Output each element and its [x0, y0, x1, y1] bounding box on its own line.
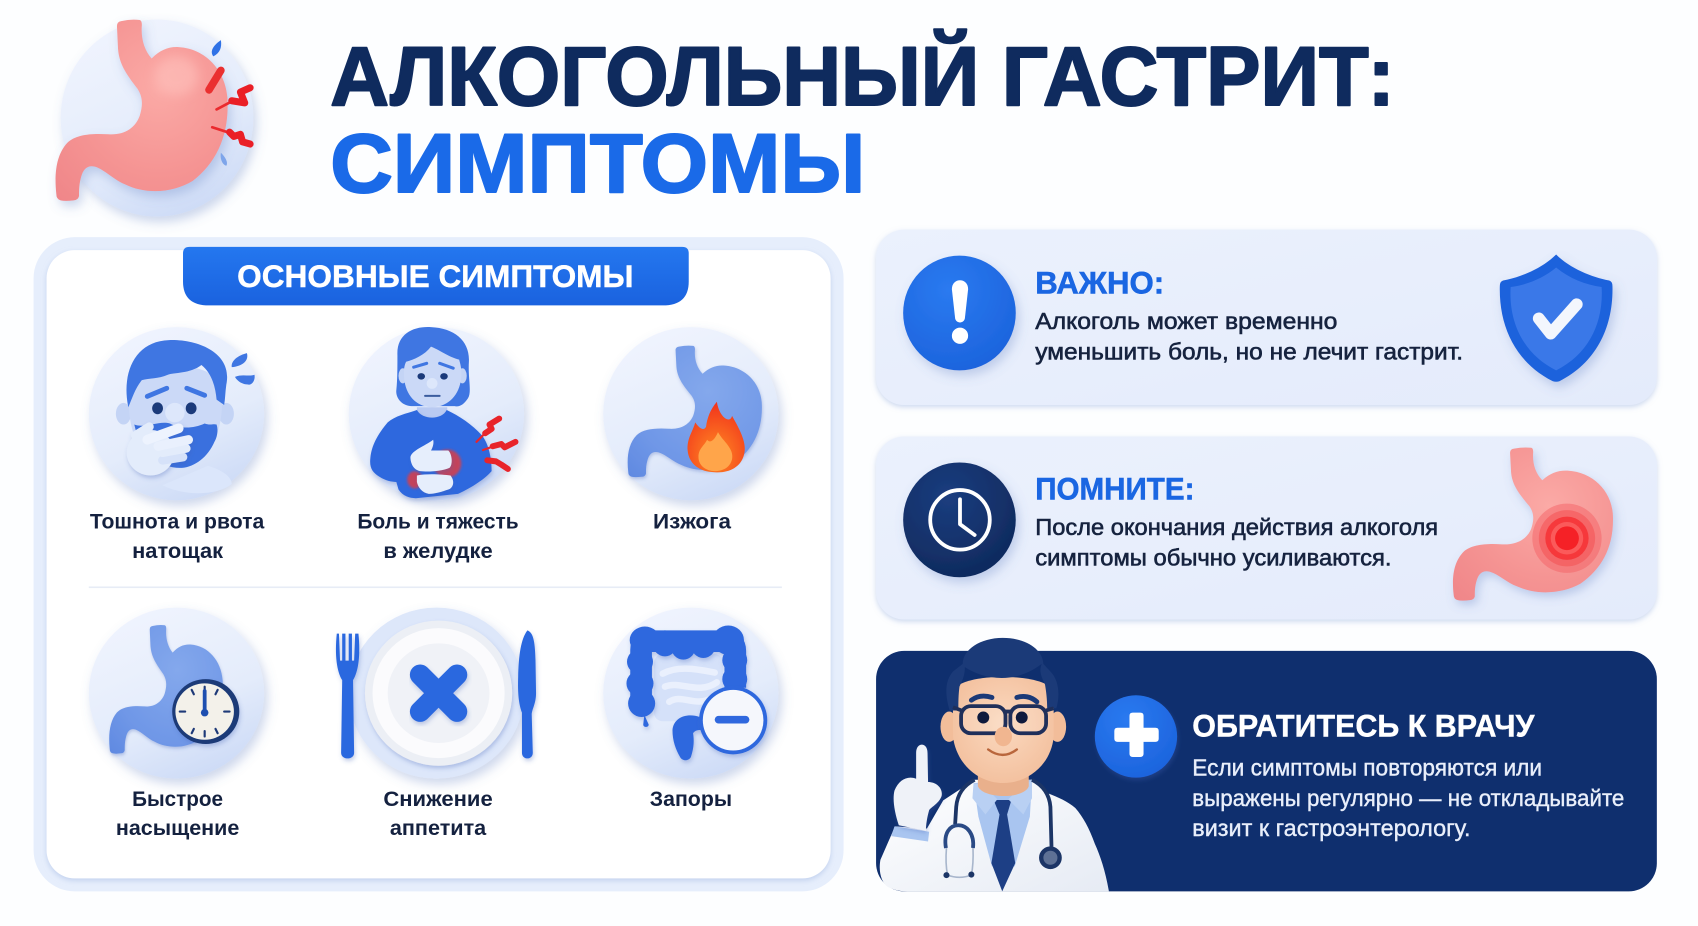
doctor coat — [880, 780, 1109, 891]
panel heading banner — [183, 247, 689, 305]
icon: plate — [365, 621, 512, 766]
text: doctor advice: выражены регулярно — не откладывайте — [1192, 785, 1624, 811]
heading: see a doctor: ОБРАТИТЕСЬ К ВРАЧУ — [1192, 708, 1535, 743]
title — [330, 29, 1395, 210]
icon: flame — [688, 402, 745, 472]
icon: upper hand — [410, 440, 452, 472]
text: doctor advice: Если симптомы повторяются или — [1192, 754, 1542, 780]
text: remember note: симптомы обычно усиливаются. — [1035, 544, 1392, 570]
heading: important: ВАЖНО: — [1035, 266, 1164, 301]
label: pain and heaviness: в желудке — [383, 538, 493, 563]
text: important note — [1035, 308, 1463, 365]
label: nausea: натощак — [132, 538, 223, 563]
doctor head — [941, 638, 1066, 783]
label: early satiety: Быстрое — [132, 786, 223, 811]
icon: cross on plate — [420, 675, 457, 712]
panel: remember — [876, 436, 1657, 619]
panel heading banner: ОСНОВНЫЕ СИМПТОМЫ — [237, 259, 634, 294]
icon: plus — [1095, 695, 1177, 778]
text: doctor advice — [1192, 754, 1624, 841]
symptom: reduced appetite — [336, 608, 536, 779]
label: reduced appetite — [383, 786, 493, 840]
symptom: nausea — [89, 327, 264, 500]
panel: main symptoms — [34, 237, 844, 891]
label: reduced appetite: аппетита — [390, 815, 487, 840]
heading: remember: ПОМНИТЕ: — [1035, 471, 1194, 506]
symptom: heartburn — [603, 327, 779, 500]
symptom: constipation — [603, 608, 779, 779]
label: pain and heaviness — [357, 509, 519, 563]
text: important note: Алкоголь может временно — [1035, 308, 1337, 334]
icon: fork — [336, 634, 359, 758]
icon: colon — [626, 625, 747, 760]
icon: shield with check — [1500, 255, 1612, 382]
symptom: pain and heaviness — [349, 327, 524, 500]
icon: hand over mouth — [127, 427, 188, 475]
label: nausea — [90, 509, 265, 563]
title: СИМПТОМЫ — [330, 117, 865, 210]
text: important note: уменьшить боль, но не лечит гастрит. — [1035, 339, 1463, 365]
panel: see a doctor — [876, 638, 1657, 891]
panel: important — [876, 230, 1657, 405]
icon: exclamation — [903, 256, 1016, 370]
label: early satiety — [116, 786, 239, 840]
icon: lower hand — [417, 474, 453, 494]
label: heartburn: Изжога — [653, 509, 732, 534]
text: remember note: После окончания действия алкоголя — [1035, 514, 1438, 540]
stethoscope — [943, 780, 1060, 878]
doctor raised hand — [891, 745, 942, 842]
icon: clock — [903, 462, 1016, 577]
icon: small intestine — [654, 654, 723, 721]
text: remember note — [1035, 514, 1438, 570]
text: doctor advice: визит к гастроэнтерологу. — [1192, 815, 1471, 841]
illustration: doctor — [880, 638, 1109, 891]
symptom: early satiety — [89, 608, 264, 779]
label: constipation: Запоры — [650, 786, 732, 811]
label: pain and heaviness: Боль и тяжесть — [357, 509, 519, 534]
icon: knife — [518, 630, 536, 758]
icon: stomach with pain spot — [1453, 447, 1613, 601]
label: early satiety: насыщение — [116, 815, 239, 840]
doctor shirt and tie — [972, 780, 1032, 891]
icon: minus badge — [699, 686, 767, 754]
label: reduced appetite: Снижение — [383, 786, 493, 811]
title: АЛКОГОЛЬНЫЙ ГАСТРИТ: — [330, 29, 1395, 123]
icon: inflamed stomach header — [56, 19, 253, 217]
label: nausea: Тошнота и рвота — [90, 509, 265, 534]
icon: clock on stomach — [172, 679, 239, 744]
